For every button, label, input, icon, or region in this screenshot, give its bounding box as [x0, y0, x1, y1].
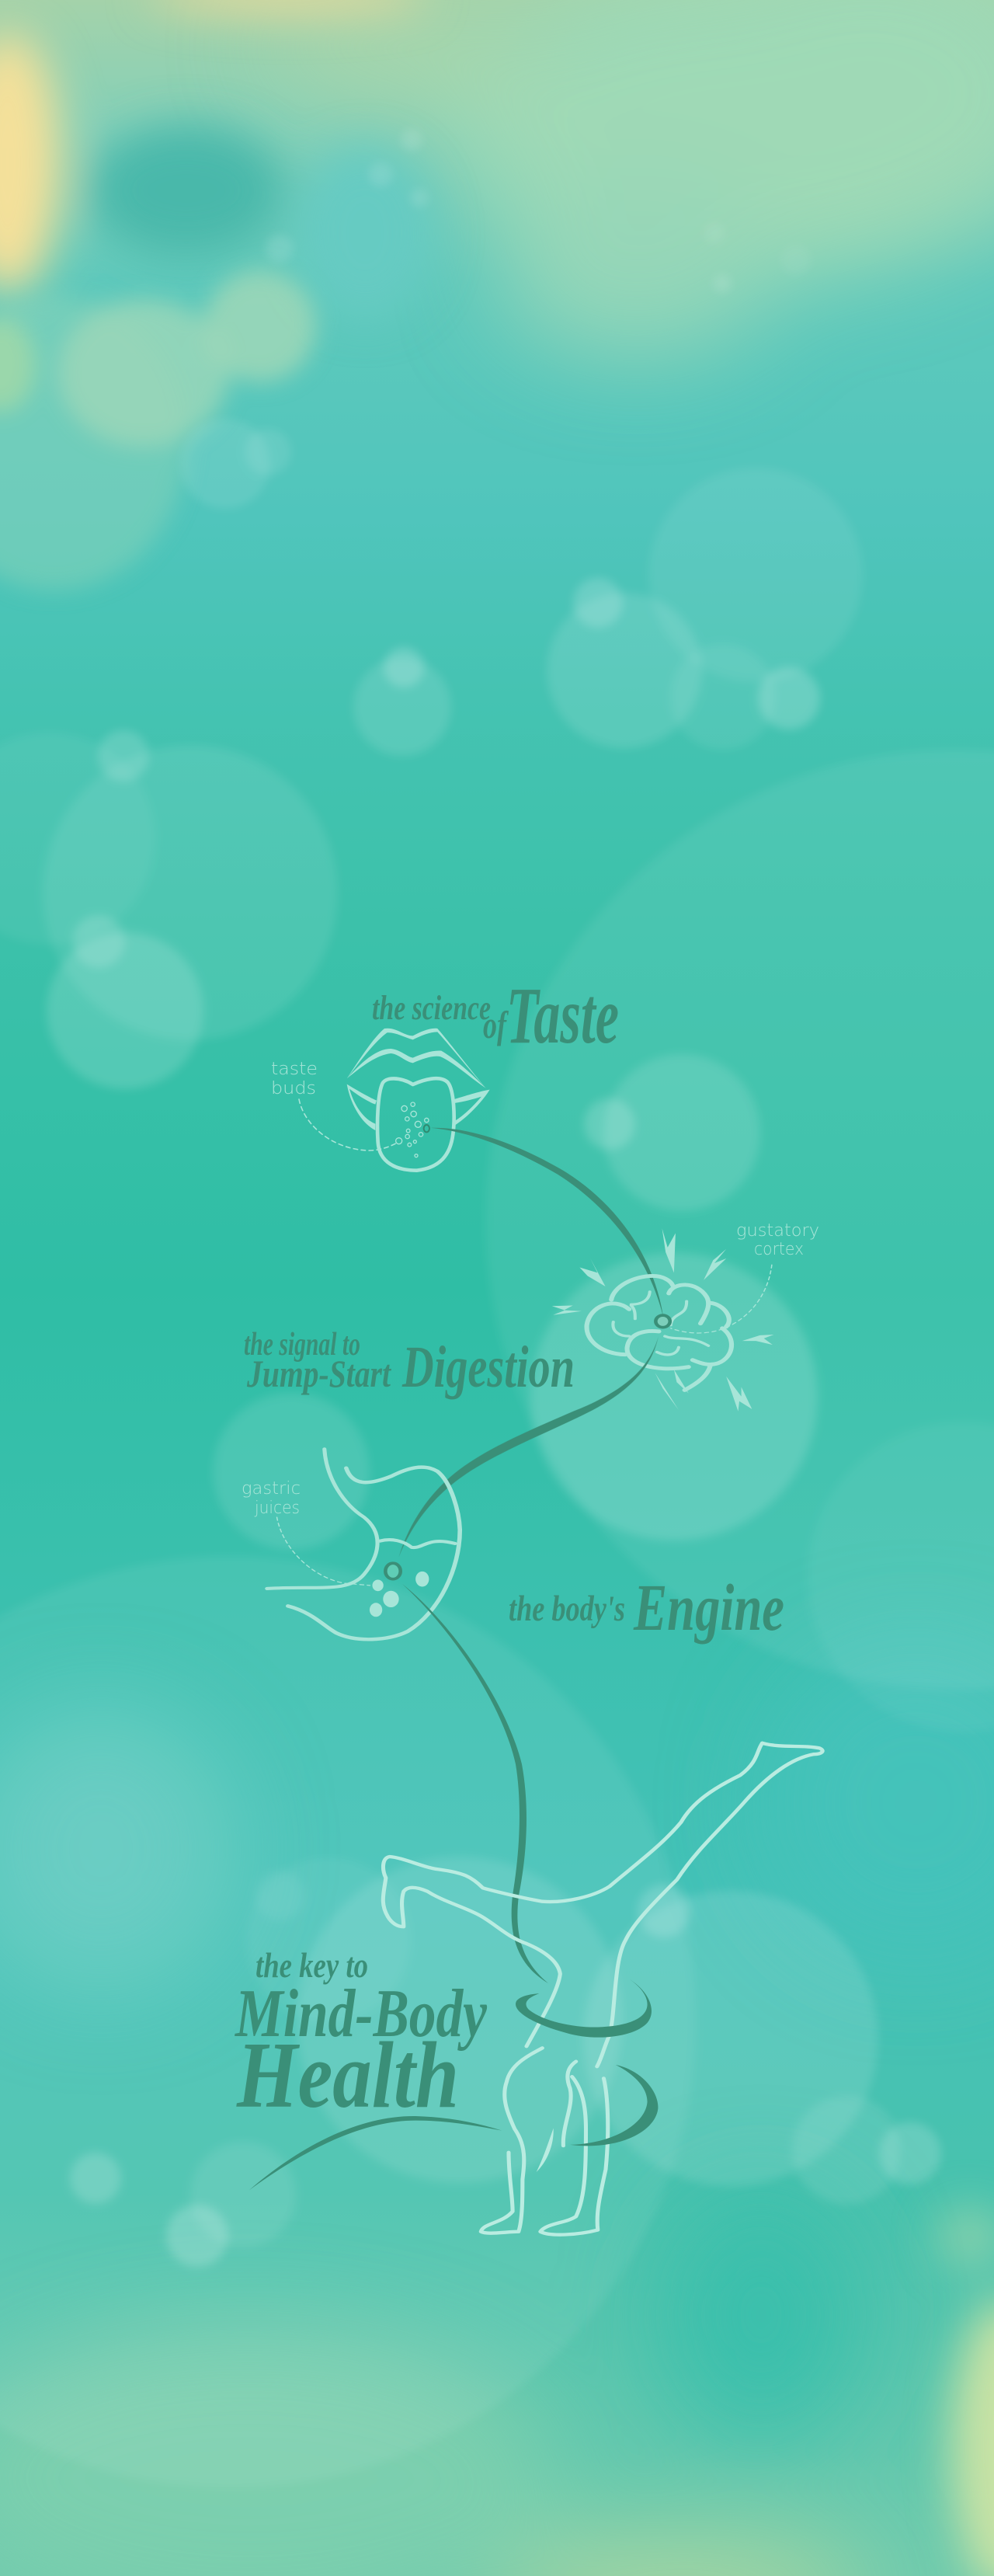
heading: the body's Engine [509, 1570, 784, 1645]
heading: the signal to Jump-Start Digestion [244, 1327, 575, 1400]
heading: the science of Taste: of [483, 1003, 509, 1046]
heading: the key to Mind-Body Health: the key to [255, 1945, 368, 1985]
heading: the key to Mind-Body Health [234, 1945, 488, 2128]
connector: stomach to body [402, 1584, 548, 1983]
label: gustatory cortex [736, 1221, 819, 1259]
heading: the body's Engine: Engine [633, 1570, 784, 1645]
label: gastric juices: juices [254, 1499, 300, 1518]
heading: the signal to Jump-Start Digestion: Jump-Start [246, 1352, 392, 1395]
heading: the body's Engine: the body's [509, 1589, 625, 1629]
illustration: handstand figure [383, 1743, 822, 2235]
connector: brain to stomach [399, 1336, 659, 1557]
heading: the key to Mind-Body Health: Health [236, 2023, 459, 2128]
heading: the science of Taste: the science [372, 989, 491, 1027]
label: gustatory cortex: gustatory [736, 1221, 819, 1241]
heading: the signal to Jump-Start Digestion: Digestion [401, 1335, 575, 1400]
icon: brain with sparks [552, 1228, 773, 1412]
heading: the science of Taste [372, 971, 619, 1060]
heading: the science of Taste: Taste [506, 971, 619, 1060]
label: gustatory cortex: cortex [754, 1240, 804, 1259]
icon: stomach with gastric juices [267, 1449, 460, 1639]
label: gastric juices [242, 1479, 301, 1518]
heading: the signal to Jump-Start Digestion: the signal to [244, 1327, 360, 1363]
label: taste buds: taste [271, 1060, 318, 1079]
icon: mouth and tongue with taste buds [299, 1029, 490, 1171]
label: taste buds: buds [271, 1079, 316, 1098]
label: taste buds [271, 1060, 318, 1098]
heading: the key to Mind-Body Health: Mind-Body [234, 1976, 488, 2052]
label: gastric juices: gastric [242, 1479, 301, 1499]
connector: tongue to brain [431, 1128, 664, 1319]
swooshes: energy rings around body [249, 1978, 658, 2190]
